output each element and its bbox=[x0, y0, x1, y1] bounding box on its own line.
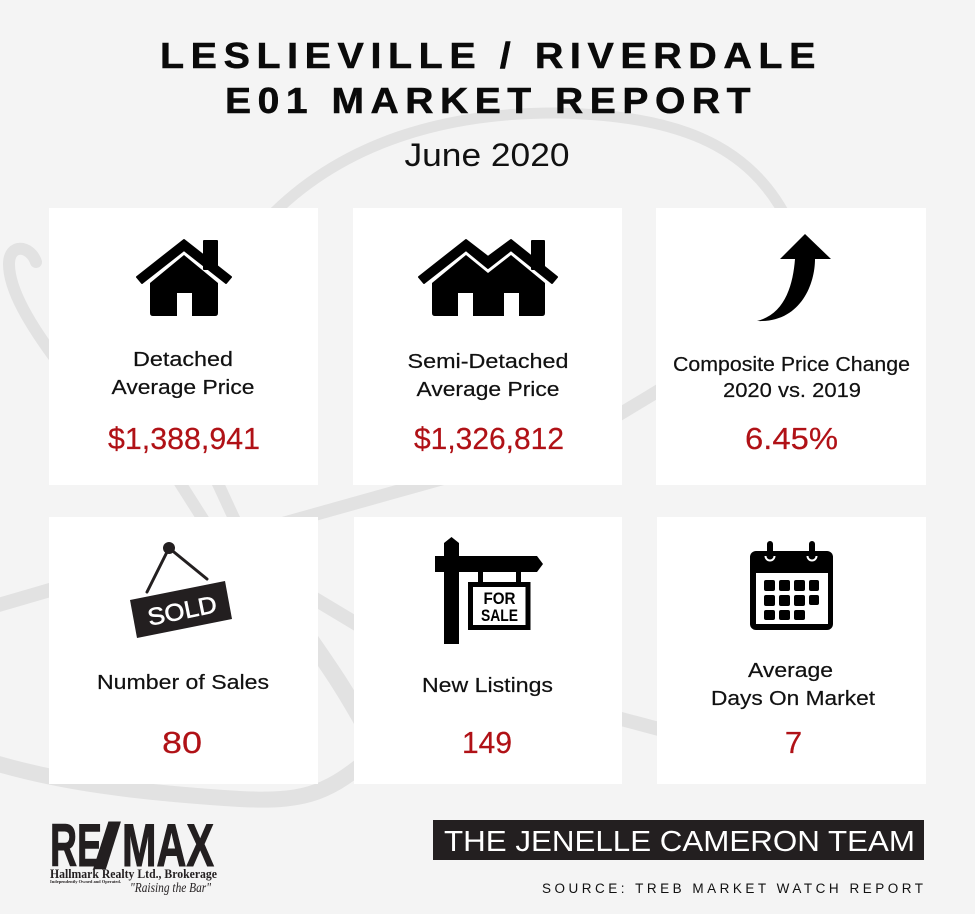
value: sales: 80 bbox=[162, 725, 202, 760]
panel: number of sales bbox=[49, 517, 318, 784]
label: detached: Average Price bbox=[112, 377, 254, 399]
label: composite price change: Composite Price Change bbox=[673, 354, 910, 376]
icon: sold sign: SOLD bbox=[145, 591, 219, 632]
label: new listings: New Listings bbox=[422, 675, 553, 697]
value: composite change: 6.45% bbox=[745, 421, 838, 456]
logo: RE/MAX Hallmark Realty: / bbox=[92, 810, 122, 882]
label: detached bbox=[112, 349, 254, 399]
panel: new listings bbox=[354, 517, 622, 784]
value: days: 7 bbox=[785, 725, 802, 760]
logo: RE/MAX Hallmark Realty: RE bbox=[50, 812, 102, 879]
banner: team name: THE JENELLE CAMERON TEAM bbox=[444, 826, 915, 858]
panel: composite price change bbox=[656, 208, 926, 485]
icon: for sale sign: SALE bbox=[481, 607, 518, 625]
icon: for sale sign bbox=[435, 537, 543, 644]
logo: RE/MAX Hallmark Realty: MAX bbox=[122, 812, 214, 879]
icon: calendar bbox=[750, 544, 833, 630]
icon: sold sign bbox=[130, 542, 232, 638]
label: composite price change: 2020 vs. 2019 bbox=[723, 380, 861, 402]
label: semi-detached: Average Price bbox=[416, 379, 560, 401]
panel: semi-detached average price bbox=[353, 208, 622, 485]
logo: RE/MAX Hallmark Realty bbox=[50, 810, 217, 896]
value: listings: 149 bbox=[462, 725, 512, 760]
icon: semi-detached houses bbox=[419, 240, 557, 316]
panel: detached average price bbox=[49, 208, 318, 485]
label: semi-detached bbox=[408, 351, 568, 401]
logo: RE/MAX Hallmark Realty: Hallmark Realty Ltd., Brokerage bbox=[50, 867, 217, 881]
subtitle: date: June 2020 bbox=[404, 137, 570, 173]
title bbox=[160, 35, 822, 121]
logo: RE/MAX Hallmark Realty: "Raising the Bar" bbox=[130, 881, 211, 896]
icon: for sale sign: FOR bbox=[484, 590, 516, 608]
label: average days on market: Average bbox=[748, 660, 833, 682]
value: semi-detached price: $1,326,812 bbox=[414, 421, 564, 456]
logo: RE/MAX Hallmark Realty: Independently Owned and Operated. bbox=[50, 879, 121, 884]
icon: upward arrow bbox=[757, 234, 831, 321]
label: average days on market bbox=[711, 660, 876, 710]
label: average days on market: Days On Market bbox=[711, 688, 876, 710]
label: composite price change bbox=[673, 354, 910, 402]
title: LESLIEVILLE / RIVERDALE bbox=[160, 35, 822, 76]
label: number of sales: Number of Sales bbox=[97, 672, 269, 694]
label: semi-detached: Semi-Detached bbox=[408, 351, 568, 373]
value: detached price: $1,388,941 bbox=[108, 421, 260, 456]
icon: house bbox=[137, 240, 231, 316]
title: E01 MARKET REPORT bbox=[225, 80, 757, 121]
label: detached: Detached bbox=[133, 349, 233, 371]
source note: SOURCE: TREB MARKET WATCH REPORT bbox=[542, 881, 923, 896]
panel: average days on market bbox=[657, 517, 926, 784]
